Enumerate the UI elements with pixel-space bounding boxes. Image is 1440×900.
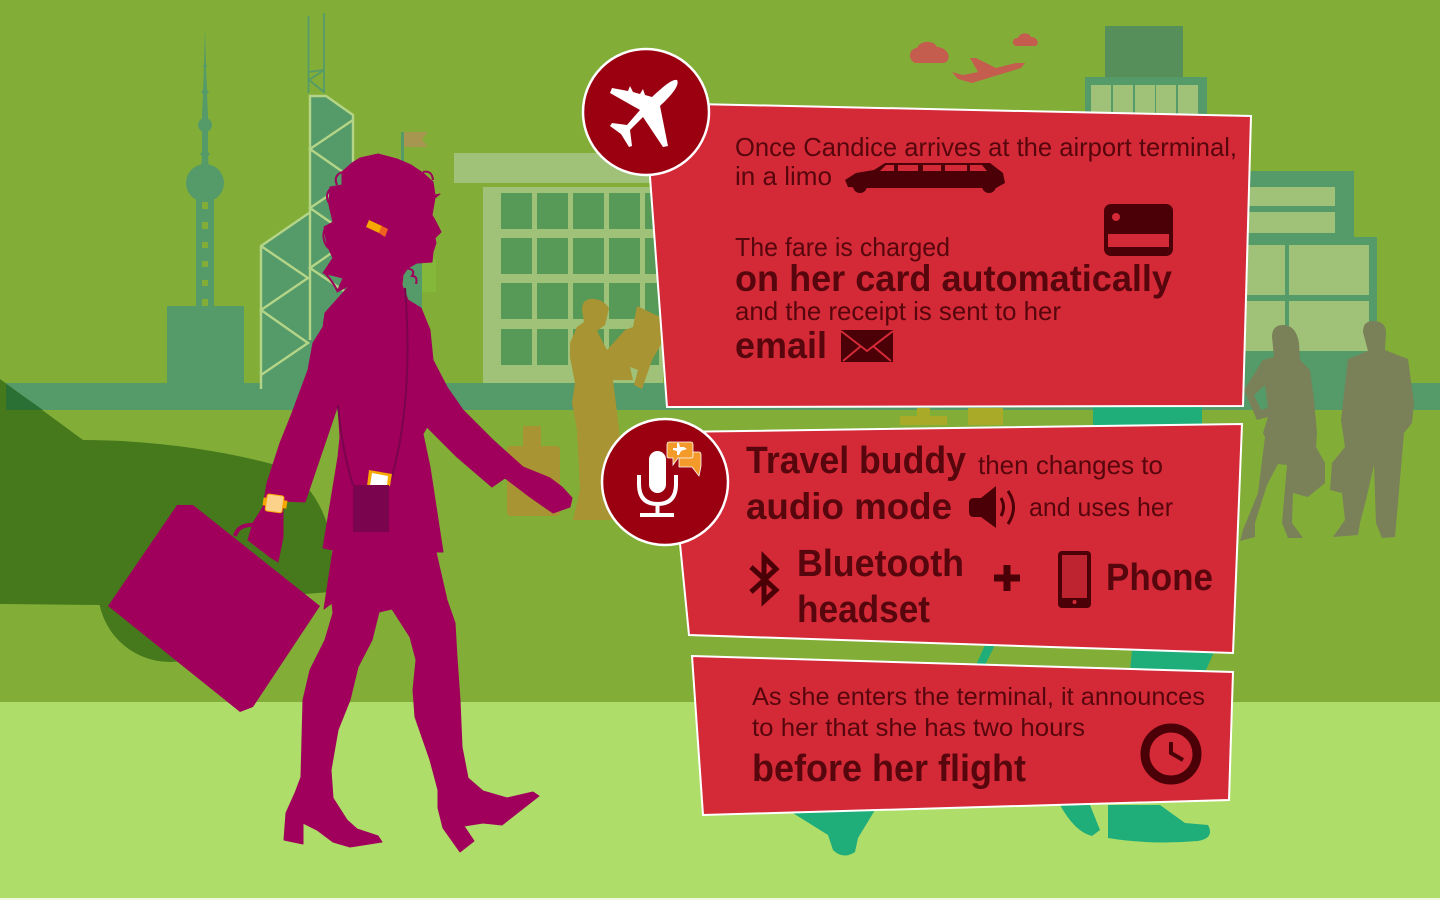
text: two hours: to her that she has two hours [752, 714, 1085, 742]
text: announcement: As she enters the terminal, it announces [752, 683, 1205, 711]
couple silhouettes [1240, 321, 1414, 541]
car silhouette [0, 379, 332, 662]
hair curls [323, 172, 433, 292]
icon: limo [845, 163, 1005, 193]
bag strap [338, 288, 408, 485]
luggage silhouette [507, 426, 560, 516]
woman silhouette [248, 154, 572, 852]
skyline strip [0, 383, 1440, 410]
text: travel buddy: Travel buddy [746, 440, 966, 482]
panel: airport arrival [650, 103, 1251, 407]
panel: audio mode [669, 424, 1242, 653]
man reading silhouette [570, 299, 662, 520]
badge: airplane [583, 49, 709, 175]
panel: terminal announcement [692, 656, 1233, 815]
text: audio mode: audio mode [746, 486, 952, 527]
sky clouds and plane [910, 33, 1038, 83]
silhouette: man with bag [1330, 321, 1414, 538]
icon: envelope [841, 330, 893, 362]
icon: plus [994, 565, 1020, 591]
text: then changes to: then changes to [978, 450, 1163, 480]
walking person legs behind panels [788, 405, 1215, 856]
icon: phone [1058, 551, 1091, 608]
pouch [353, 485, 389, 532]
icon: chat bubbles [667, 442, 701, 476]
text: in a limo: in a limo [735, 161, 832, 191]
text: card: on her card automatically [735, 258, 1172, 299]
smart watch [263, 494, 287, 513]
text: email: email [735, 325, 827, 366]
briefcase [108, 505, 320, 712]
phone in pouch [367, 470, 392, 486]
icon: bluetooth [751, 557, 776, 601]
text: bluetooth: Bluetooth [797, 543, 964, 585]
terminal building left [454, 153, 663, 383]
building behind woman's neck [403, 259, 436, 312]
text: arrival: Once Candice arrives at the airport terminal, [735, 132, 1237, 162]
terminal building right [1085, 26, 1377, 383]
badge: microphone [602, 419, 728, 545]
icon: speaker [969, 486, 1014, 528]
oriental pearl tower [167, 28, 244, 383]
text: phone: Phone [1106, 557, 1213, 599]
flag [401, 132, 428, 166]
icon: clock [1145, 728, 1197, 780]
yellow luggage behind panel [900, 408, 1003, 425]
earpiece [366, 220, 388, 237]
text: fare: The fare is charged [735, 232, 950, 262]
icon: credit card [1104, 204, 1173, 256]
text: and uses her: and uses her [1029, 492, 1173, 522]
woman with briefcase [108, 154, 572, 852]
text: receipt: and the receipt is sent to her [735, 296, 1061, 326]
text: before her flight: before her flight [752, 748, 1026, 790]
text: headset: headset [797, 589, 930, 631]
silhouette: woman with bag [1240, 325, 1325, 541]
bank of china tower [261, 13, 353, 389]
